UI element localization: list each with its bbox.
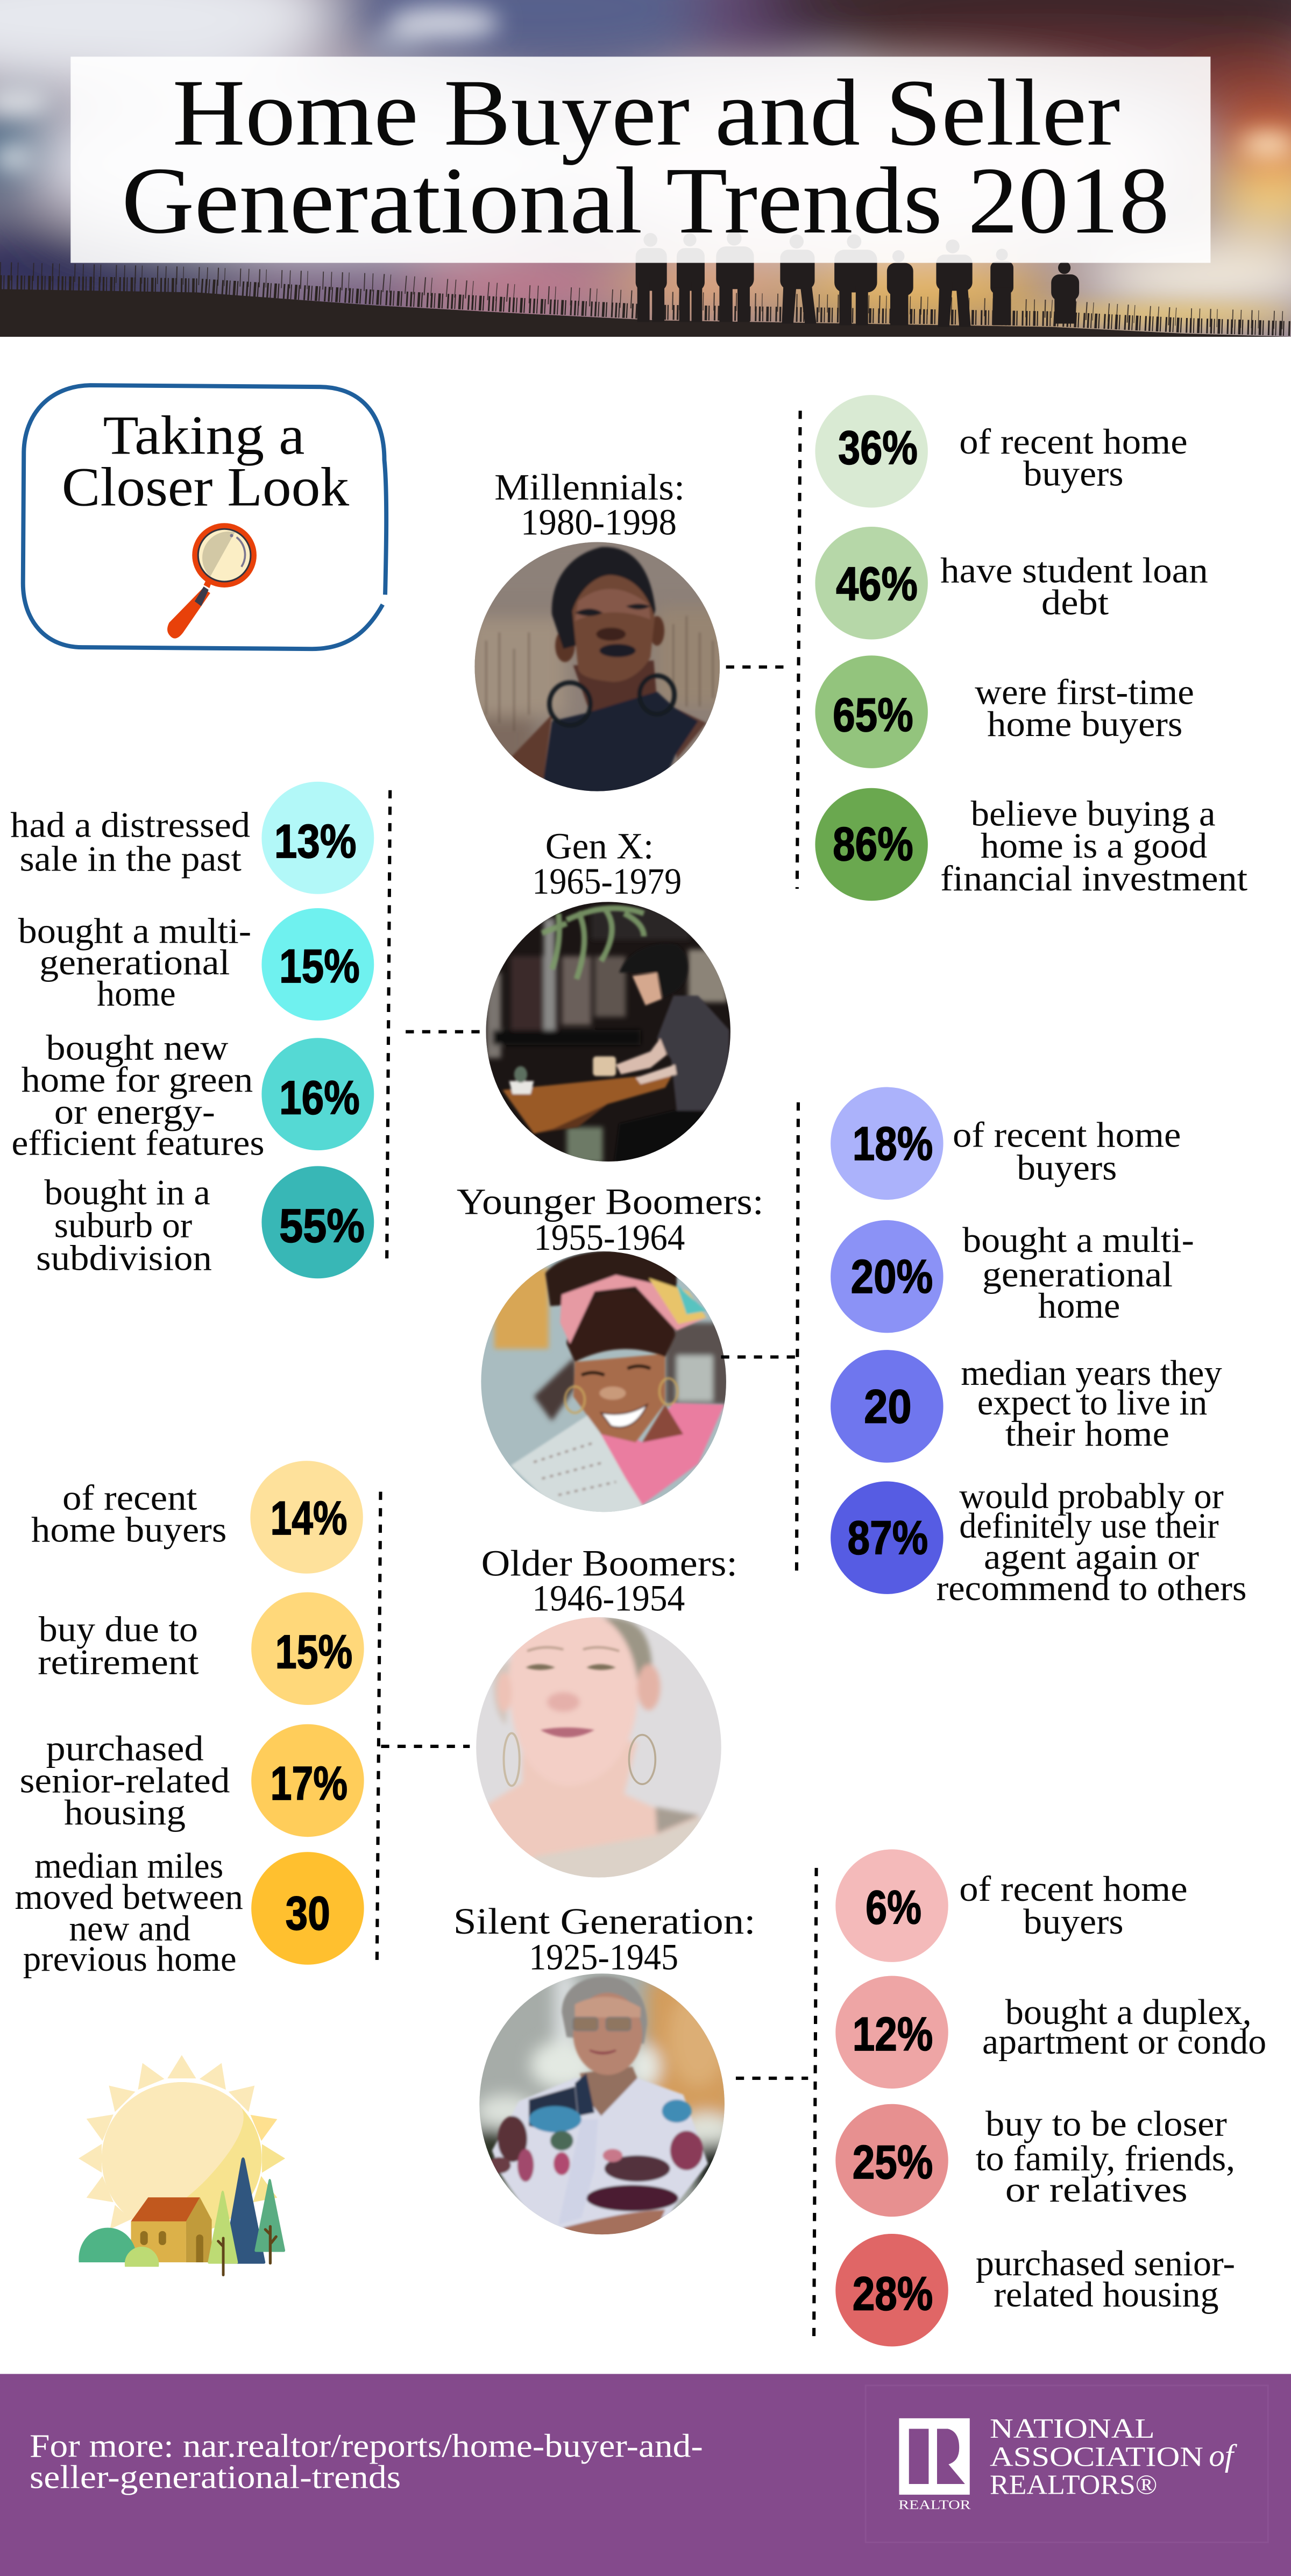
heading: Millennials — [494, 466, 685, 543]
heading: Silent Generation — [453, 1901, 756, 1977]
stat: 15% — [38, 1593, 364, 1705]
stat: 30 median miles — [15, 1845, 364, 1979]
connector: photo to stats — [406, 1031, 480, 1032]
stat: 55%: subdivision — [36, 1237, 212, 1278]
stat: 20 median years: their home — [1005, 1413, 1169, 1454]
stat: 36%: of recent home — [959, 421, 1188, 462]
panel: taking a closer look — [23, 385, 386, 649]
stat: 20%: bought a multi- — [962, 1220, 1194, 1260]
stat: 18%: 18% — [853, 1117, 933, 1170]
heading: Millennials: 1980-1998 — [521, 502, 677, 543]
stat: 14%: of recent — [62, 1477, 197, 1518]
grass foreground — [0, 289, 1290, 337]
stat: 30 median miles: previous home — [23, 1938, 237, 1979]
silhouettes of people — [636, 231, 1079, 327]
stat: 65%: were first-time — [975, 671, 1194, 712]
stat: 46%: debt — [1041, 582, 1109, 622]
stat: 25%: or relatives — [1005, 2169, 1188, 2210]
photo: older woman in floral blouse — [473, 1968, 736, 2244]
stat: 30 median miles: 30 — [286, 1886, 330, 1940]
heading: Silent Generation: Silent Generation: — [453, 1901, 756, 1942]
connector: photo to stats — [721, 1356, 795, 1357]
stat: 55% — [36, 1166, 374, 1278]
footer band — [0, 2374, 1291, 2576]
stat: 20% — [831, 1220, 1194, 1333]
heading: Gen X: Gen X: — [545, 825, 654, 866]
stat: 20 median years: 20 — [864, 1379, 912, 1433]
title panel — [70, 56, 1210, 263]
dashed divider — [814, 1868, 817, 2344]
connector: photo to stats — [726, 667, 785, 668]
stat: 30 median miles: new and — [69, 1908, 190, 1948]
heading: Older Boomers: Older Boomers: — [481, 1542, 737, 1583]
stat: 20 median years: median years they — [961, 1353, 1222, 1393]
title — [122, 60, 1169, 253]
logo: National Association of Realtors: of — [1209, 2438, 1237, 2473]
stat: 20%: generational — [982, 1254, 1173, 1294]
stat: 87%: definitely use their — [959, 1505, 1219, 1546]
section: Gen X — [10, 782, 739, 1278]
stat: 30 median miles: median miles — [34, 1845, 223, 1886]
stat: 15%: retirement — [38, 1642, 199, 1682]
stat: 12% — [835, 1976, 1266, 2089]
stat: 15%: 15% — [275, 1625, 352, 1679]
stat: 46% — [815, 527, 1208, 639]
photo: woman with grey hair and earrings — [476, 1617, 721, 1878]
stat: 20 median years: expect to live in — [977, 1382, 1207, 1423]
bushes — [79, 2228, 159, 2267]
stat: 28%: 28% — [853, 2267, 933, 2320]
stat: 28% — [835, 2234, 1235, 2346]
stat: 15%: bought a multi- — [18, 911, 251, 951]
stat: 20 median years — [831, 1350, 1222, 1463]
stat: 87%: recommend to others — [936, 1568, 1247, 1608]
heading: Younger Boomers: 1955-1964 — [534, 1217, 685, 1258]
stat: 86%: home is a good — [981, 825, 1207, 866]
stat: 87%: 87% — [848, 1511, 928, 1565]
stat: 12%: apartment or condo — [982, 2021, 1266, 2062]
stat: 16%: 16% — [279, 1071, 360, 1124]
logo: National Association of Realtors: REALTOR — [898, 2497, 971, 2512]
stat: 15%: 15% — [279, 939, 360, 993]
logo: National Association of Realtors: ASSOCIATION — [990, 2441, 1203, 2472]
stat: 15% — [18, 908, 374, 1021]
dashed divider — [797, 411, 800, 889]
logo: National Association of Realtors: REALTORS® — [990, 2469, 1157, 2500]
heading: Taking a — [103, 406, 304, 466]
stat: 14%: 14% — [271, 1491, 347, 1545]
stat: 86%: believe buying a — [971, 793, 1216, 833]
stat: 17%: purchased — [46, 1728, 204, 1768]
stat: 25%: 25% — [853, 2135, 933, 2189]
section: Silent Generation — [453, 1849, 1266, 2346]
photo: woman at cafe table — [486, 902, 730, 1162]
icon: magnifying glass — [167, 523, 257, 639]
stat: 87%: would probably or — [959, 1476, 1224, 1516]
stat: 86%: 86% — [833, 817, 913, 871]
stat: 20%: home — [1038, 1285, 1120, 1326]
dashed divider — [797, 1102, 798, 1577]
stat: 16%: or energy- — [54, 1092, 215, 1132]
photo: smiling woman in headscarf — [481, 1251, 726, 1512]
illustration: sun, house and trees — [79, 2055, 285, 2275]
stat: 25%: to family, friends, — [976, 2138, 1235, 2178]
stat: 86% — [815, 788, 1247, 901]
sunset sky background — [0, 0, 1291, 345]
stat: 17% — [20, 1724, 364, 1837]
stat: 30 median miles: moved between — [15, 1877, 243, 1917]
heading: Silent Generation: 1925-1945 — [529, 1936, 678, 1977]
heading: Gen X — [532, 825, 682, 902]
stat: 65%: home buyers — [987, 704, 1182, 744]
logo: National Association of Realtors — [866, 2386, 1268, 2542]
stat: 6% — [835, 1849, 1188, 1962]
stat: 55%: 55% — [279, 1199, 365, 1252]
stat: 15%: buy due to — [39, 1609, 198, 1650]
stat: 16% — [11, 1028, 374, 1163]
stat: 13%: 13% — [274, 815, 357, 868]
title: Generational Trends 2018 — [122, 148, 1169, 253]
stat: 65%: 65% — [833, 688, 913, 741]
stat: 6%: buyers — [1023, 1901, 1124, 1942]
dashed divider — [387, 790, 390, 1265]
stat: 17%: senior-related — [20, 1760, 230, 1800]
sun — [79, 2055, 285, 2234]
connector: photo to stats — [381, 1746, 470, 1747]
stat: 18%: buyers — [1017, 1147, 1117, 1187]
stat: 13%: had a distressed — [10, 804, 250, 845]
stat: 20%: 20% — [851, 1250, 933, 1303]
heading: Younger Boomers — [457, 1181, 764, 1258]
stat: 28%: purchased senior- — [976, 2243, 1235, 2283]
stat: 25% — [835, 2104, 1235, 2217]
stat: 87%: agent again or — [984, 1537, 1199, 1577]
stat: 16%: home for green — [22, 1059, 253, 1100]
heading: Older Boomers — [481, 1542, 737, 1619]
house — [131, 2197, 212, 2262]
heading — [62, 406, 350, 518]
stat: 36% — [815, 395, 1188, 508]
stat: 15%: generational — [39, 942, 230, 982]
dashed divider — [377, 1492, 380, 1966]
stat: 16%: efficient features — [11, 1123, 265, 1163]
stat: 13%: sale in the past — [20, 838, 242, 879]
stat: 55%: bought in a — [44, 1172, 210, 1212]
stat: 36%: buyers — [1023, 453, 1124, 493]
stat: 36%: 36% — [838, 421, 918, 475]
connector: photo to stats — [736, 2078, 808, 2079]
section: Younger Boomers — [457, 1087, 1247, 1608]
hand-drawn frame — [23, 385, 386, 649]
header banner with sunset photo and title — [0, 0, 1291, 345]
stat: 18% — [831, 1087, 1181, 1200]
stat: 12%: 12% — [853, 2007, 933, 2061]
stat: 12%: bought a duplex, — [1005, 1992, 1252, 2032]
section: Millennials — [468, 395, 1247, 901]
title: Home Buyer and Seller — [173, 60, 1120, 166]
stat: 18%: of recent home — [953, 1114, 1181, 1155]
section: Older Boomers — [15, 1461, 737, 1979]
stat: 6%: 6% — [866, 1881, 921, 1934]
heading: Gen X: 1965-1979 — [532, 861, 682, 902]
stat: 15%: home — [97, 973, 176, 1014]
stat: 17%: 17% — [271, 1757, 347, 1810]
stat: 14%: home buyers — [31, 1509, 226, 1549]
stat: 6%: of recent home — [959, 1869, 1188, 1909]
heading: Closer Look — [62, 457, 350, 518]
stat: 46%: 46% — [836, 557, 918, 610]
more info link text — [30, 2429, 703, 2495]
stat: 14% — [31, 1461, 363, 1574]
stat: 86%: financial investment — [940, 858, 1247, 898]
heading: Older Boomers: 1946-1954 — [532, 1578, 685, 1619]
stat: 13% — [10, 782, 374, 894]
heading: Younger Boomers: Younger Boomers: — [457, 1181, 764, 1222]
stat: 46%: have student loan — [940, 550, 1208, 590]
heading: Millennials: Millennials: — [494, 466, 685, 507]
stat: 65% — [815, 655, 1194, 768]
logo: National Association of Realtors: NATIONAL — [990, 2414, 1155, 2444]
stat: 87% — [831, 1476, 1247, 1608]
stat: 55%: suburb or — [54, 1205, 192, 1245]
more info link text: For more: nar.realtor/reports/home-buyer-and- — [30, 2429, 703, 2465]
stat: 25%: buy to be closer — [985, 2104, 1227, 2144]
stat: 17%: housing — [64, 1792, 186, 1832]
stat: 16%: bought new — [46, 1028, 229, 1068]
trees — [208, 2157, 285, 2275]
stat: 28%: related housing — [994, 2274, 1219, 2315]
photo: young woman with hoop earrings — [474, 542, 720, 791]
more info link text: seller-generational-trends — [30, 2459, 401, 2495]
